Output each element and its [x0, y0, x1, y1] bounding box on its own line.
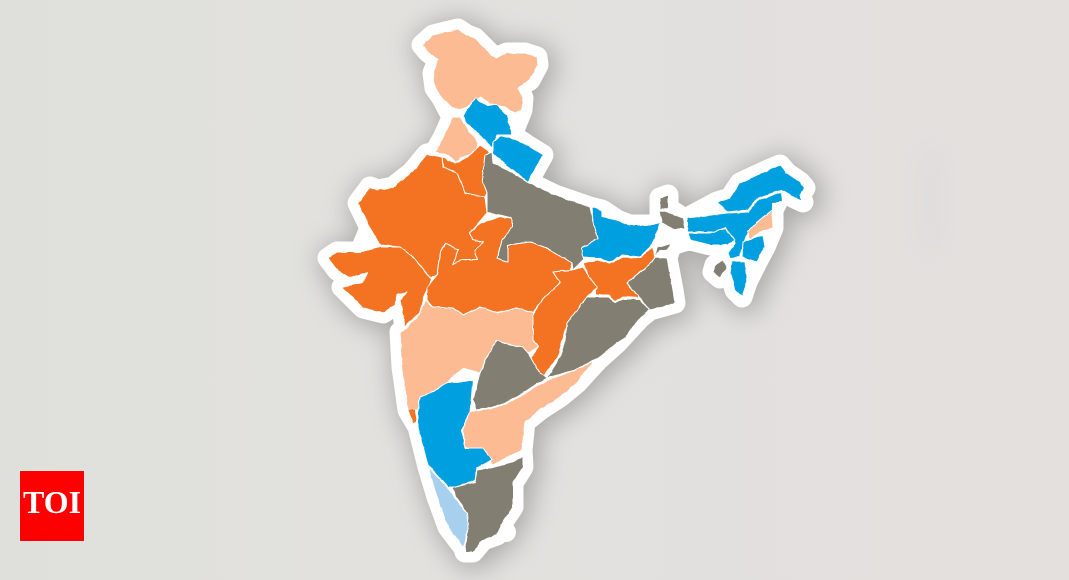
map shadow [332, 32, 809, 555]
state: Tripura [713, 260, 727, 278]
state: Madhya Pradesh [427, 217, 572, 315]
states [328, 29, 805, 552]
state: Rajasthan [358, 154, 487, 278]
state: Uttarakhand [493, 136, 543, 182]
state: West Bengal centre [659, 211, 685, 229]
state: West Bengal south [627, 243, 675, 310]
state: Kerala [428, 467, 468, 548]
state: Arunachal Pradesh [717, 165, 805, 212]
state: Mizoram [730, 260, 747, 297]
state: Goa [408, 409, 417, 423]
state: Karnataka [418, 380, 492, 487]
state: Tamil Nadu [452, 457, 523, 552]
state: Punjab [435, 117, 478, 162]
TOI logo: TOI [23, 484, 81, 520]
state: Meghalaya [688, 228, 735, 245]
state: Assam [687, 192, 783, 258]
state: Uttar Pradesh [482, 152, 598, 270]
white sticker outline [328, 29, 805, 552]
Sri Lanka notch in outline [496, 522, 516, 542]
state: Nagaland [747, 210, 773, 240]
state: Bihar [582, 207, 660, 262]
state: Haryana [442, 145, 490, 197]
state: Chhattisgarh [528, 267, 597, 377]
background shade band [924, 150, 938, 250]
state: Himachal Pradesh [463, 98, 512, 148]
state: Telangana [473, 340, 548, 410]
state: Odisha [547, 297, 650, 378]
state: Maharashtra [400, 300, 538, 410]
state: Jammu and Kashmir [422, 29, 538, 113]
state: Jharkhand [583, 247, 655, 302]
state: Gujarat [328, 247, 432, 327]
state: West Bengal north [660, 195, 668, 210]
TOI logo [20, 471, 84, 541]
state: Manipur [742, 235, 765, 262]
state: Andhra Pradesh [463, 360, 595, 465]
